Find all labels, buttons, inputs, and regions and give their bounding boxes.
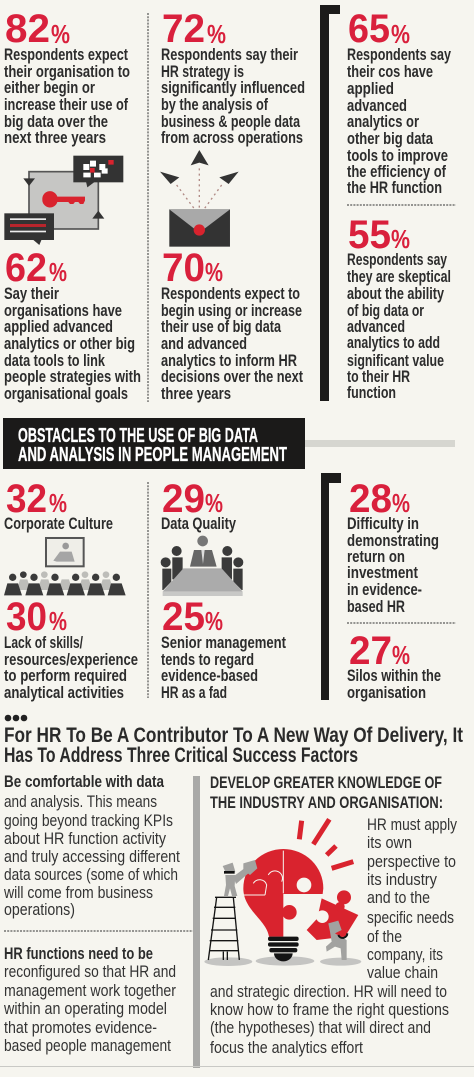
stat: 30%: analytical activities <box>4 684 124 702</box>
text block: industry knowledge: and to the <box>367 889 430 907</box>
stat: 70%: 70 <box>162 246 205 290</box>
heading: develop greater knowledge <box>210 774 443 812</box>
stat: 82% <box>4 7 130 147</box>
stat: 55%: % <box>391 224 410 254</box>
stat: 82%: big data over the <box>4 113 108 131</box>
stat: 28%: based HR <box>347 598 405 616</box>
stat: 28%: Difficulty in <box>347 515 419 533</box>
stat: 72%: by the analysis of <box>161 96 268 114</box>
bracket: obstacles right column <box>321 473 341 700</box>
stat: 30%: % <box>49 606 67 636</box>
stat: 70%: three years <box>161 385 231 403</box>
icon: presentation audience <box>4 538 126 595</box>
stat: 55%: significant value <box>347 352 444 370</box>
stat: 62%: applied advanced <box>4 318 113 336</box>
text block: comfortable with data: and analysis. This means <box>4 793 157 811</box>
stat: 70%: their use of big data <box>161 318 282 336</box>
stat: 32%: Corporate Culture <box>4 515 113 533</box>
stat: 30%: 30 <box>6 595 47 639</box>
text block: comfortable with data: data sources (some of which <box>4 866 178 884</box>
stat: 82%: 82 <box>5 7 50 51</box>
stat: 28%: return on <box>347 548 405 566</box>
stat: 70%: analytics to inform HR <box>161 352 297 370</box>
stat: 28% <box>347 477 439 616</box>
text block: reconfigured HR functions: HR functions need to be <box>4 945 153 963</box>
stat: 30% <box>4 595 138 702</box>
text block: comfortable with data: about HR function activity <box>4 830 167 848</box>
stat: 82%: increase their use of <box>4 96 128 114</box>
stat: 32%: 32 <box>6 477 47 521</box>
stat: 29%: 29 <box>162 477 205 521</box>
stat: 70%: and advanced <box>161 335 247 353</box>
stat: 29% <box>161 477 237 533</box>
heading: critical success factors <box>4 724 463 767</box>
text block: industry knowledge: perspective to <box>367 853 456 871</box>
stat: 30%: Lack of skills/ <box>4 634 83 652</box>
stat: 29%: Data Quality <box>161 515 237 533</box>
text block: comfortable with data: and truly accessing different <box>4 848 180 866</box>
stat: 55%: 55 <box>348 213 391 257</box>
stat: 65%: tools to improve <box>347 147 448 165</box>
stat: 65%: the HR function <box>347 179 442 197</box>
text block: comfortable with data <box>3 773 180 919</box>
stat: 55%: advanced <box>347 318 405 336</box>
stat: 25%: tends to regard <box>161 651 254 669</box>
stat: 72%: 72 <box>162 7 205 51</box>
stat: 25%: % <box>205 606 223 636</box>
stat: 25%: HR as a fad <box>161 684 227 702</box>
stat: 62%: analytics or other big <box>4 335 135 353</box>
stat: 55%: function <box>347 384 396 402</box>
stat: 27%: % <box>392 640 410 670</box>
icon: envelope and paper planes <box>160 150 239 247</box>
stat: 62%: 62 <box>5 246 47 290</box>
stat: 70%: % <box>205 257 223 287</box>
section banner: obstacles: AND ANALYSIS IN PEOPLE MANAGEMENT <box>18 444 287 466</box>
stat: 28%: 28 <box>349 477 392 521</box>
stat: 62%: organisational goals <box>4 385 128 403</box>
heading: critical success factors: Has To Address Three Critical Success Factors <box>4 744 358 767</box>
stat: 62%: people strategies with <box>4 368 141 386</box>
stat: 29%: % <box>205 488 223 518</box>
text block: industry knowledge: company, its <box>367 946 443 964</box>
text block: industry knowledge: specific needs <box>367 909 454 927</box>
stat: 70% <box>161 246 303 403</box>
stat: 25%: evidence-based <box>161 667 258 685</box>
stat: 62%: data tools to link <box>4 352 106 370</box>
stat: 70%: decisions over the next <box>161 368 303 386</box>
stat: 82%: next three years <box>4 129 106 147</box>
text block: industry knowledge: its industry <box>367 871 438 889</box>
text block: reconfigured HR functions: within an operating model <box>3 1000 167 1018</box>
stat: 55%: of big data or <box>347 302 424 320</box>
stat: 72%: business & people data <box>161 113 301 131</box>
stat: 55%: analytics to add <box>347 334 440 352</box>
stat: 65%: applied <box>347 80 394 98</box>
stat: 30%: to perform required <box>4 667 127 685</box>
stat: 65%: % <box>391 19 410 49</box>
stat: 72%: from across operations <box>161 129 303 147</box>
stat: 32% <box>4 477 113 533</box>
text block: industry knowledge: HR must apply <box>367 816 458 834</box>
stat: 65%: advanced <box>347 97 407 115</box>
stat: 65% <box>347 7 452 197</box>
stat: 82%: either begin or <box>4 79 95 97</box>
stat: 62% <box>4 246 141 403</box>
stat: 65%: analytics or <box>347 113 419 131</box>
stat: 72%: HR strategy is <box>161 63 244 81</box>
text block: industry knowledge <box>210 816 458 1057</box>
text block: comfortable with data: will come from business <box>3 884 153 902</box>
icon: key and speech bubbles <box>4 156 123 245</box>
text block: industry knowledge: value chain <box>367 964 438 982</box>
stat: 72%: Respondents say their <box>161 46 298 64</box>
stat: 25%: 25 <box>162 595 205 639</box>
divider: grey column bar <box>193 776 200 1068</box>
text block: reconfigured HR functions: that promotes evidence- <box>4 1019 157 1037</box>
stat: 82%: Respondents expect <box>4 46 128 64</box>
section banner: obstacles <box>3 418 455 469</box>
stat: 25% <box>161 595 286 702</box>
section banner: obstacles: OBSTACLES TO THE USE OF BIG DATA <box>18 425 258 447</box>
text block: industry knowledge: focus the analytics effort <box>210 1039 363 1057</box>
text block: comfortable with data: going beyond tracking KPIs <box>4 812 173 830</box>
stat: 65%: 65 <box>348 7 390 51</box>
bracket: top right column <box>320 5 340 401</box>
stat: 72%: significantly influenced <box>161 79 305 97</box>
stat: 27%: organisation <box>347 684 426 702</box>
text block: reconfigured HR functions <box>3 945 176 1055</box>
text block: comfortable with data: operations) <box>4 901 75 919</box>
text block: industry knowledge: its own <box>367 834 412 852</box>
stat: 62%: Say their <box>4 285 59 303</box>
stat: 25%: Senior management <box>161 634 286 652</box>
stat: 28%: investment <box>347 564 418 582</box>
icon: meeting table <box>161 536 243 596</box>
text block: reconfigured HR functions: based people management <box>4 1037 171 1055</box>
stat: 28%: % <box>392 488 410 518</box>
stat: 72% <box>161 7 305 147</box>
text block: comfortable with data: Be comfortable with data <box>4 773 165 791</box>
stat: 55%: about the ability <box>347 285 445 303</box>
stat: 27% <box>347 629 441 702</box>
stat: 55%: to their HR <box>347 368 410 386</box>
stat: 55% <box>347 213 451 402</box>
stat: 72%: % <box>207 19 226 49</box>
stat: 30%: resources/experience <box>4 651 138 669</box>
stat: 65%: other big data <box>347 130 434 148</box>
icon: three dots <box>5 715 27 721</box>
text block: industry knowledge: (the hypotheses) that will direct and <box>210 1019 431 1037</box>
icon: light bulb puzzle <box>204 819 361 966</box>
stat: 27%: Silos within the <box>347 667 441 685</box>
text block: reconfigured HR functions: management work together <box>4 982 176 1000</box>
stat: 62%: organisations have <box>4 302 122 320</box>
text block: industry knowledge: of the <box>367 928 402 946</box>
stat: 32%: % <box>49 488 67 518</box>
stat: 27%: 27 <box>349 629 392 673</box>
stat: 28%: demonstrating <box>347 532 439 550</box>
text block: reconfigured HR functions: reconfigured so that HR and <box>4 963 176 981</box>
stat: 62%: % <box>49 257 67 287</box>
stat: 70%: begin using or increase <box>161 302 302 320</box>
stat: 82%: % <box>51 19 70 49</box>
stat: 65%: their cos have <box>347 63 433 81</box>
stat: 82%: their organisation to <box>4 63 130 81</box>
stat: 65%: the efficiency of <box>347 163 446 181</box>
stat: 28%: in evidence- <box>347 581 422 599</box>
stat: 70%: Respondents expect to <box>161 285 300 303</box>
